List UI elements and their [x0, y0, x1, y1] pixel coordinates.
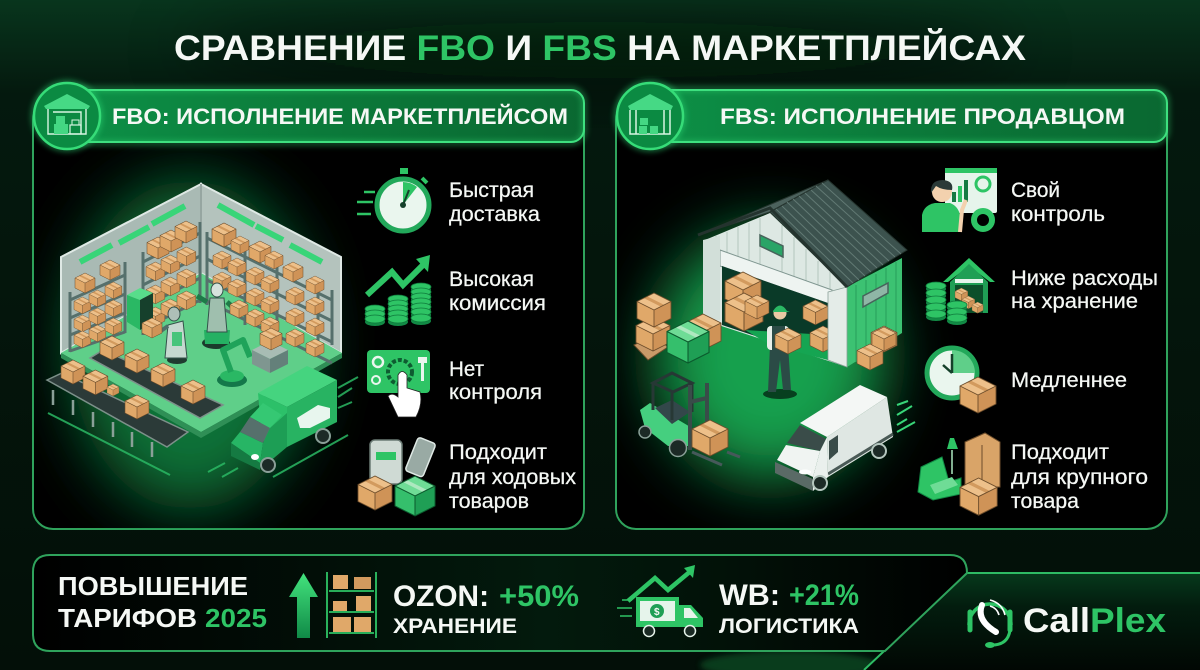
- panel glow: [655, 230, 885, 480]
- green truck: [231, 366, 337, 472]
- shelves and boxes: left wall: [70, 221, 200, 352]
- text: suitable for fast-moving goods: [449, 441, 576, 513]
- text: no control: контроля: [449, 381, 542, 404]
- heading: tariff increase: [58, 571, 267, 633]
- text: fast delivery: [449, 179, 540, 226]
- icon: warehouse and coins: [926, 258, 995, 325]
- text: wordmark: [1023, 602, 1166, 640]
- text: lower storage costs: Ниже расходы: [1011, 267, 1158, 290]
- text: suitable for large goods: [1011, 441, 1148, 513]
- text: suitable for large goods: для крупного: [1011, 466, 1148, 489]
- heading: tariff increase: ПОВЫШЕНИЕ: [58, 571, 248, 601]
- warehouse building: [698, 180, 907, 367]
- warehouse floor: [61, 273, 342, 432]
- stat: OZON: ХРАНЕНИЕ: [393, 615, 517, 638]
- illustration: automated marketplace warehouse with truck: [47, 184, 358, 477]
- panel: tariff increase 2025: [33, 555, 967, 651]
- warehouse walls: [61, 184, 341, 353]
- text: lower storage costs: на хранение: [1011, 290, 1138, 313]
- icon: up arrow: [289, 573, 318, 638]
- heading: tariff increase: ТАРИФОВ: [58, 603, 197, 633]
- text: suitable for large goods: Подходит: [1011, 441, 1109, 464]
- motion streaks: [48, 377, 358, 477]
- icon: warehouse badge FBO: [31, 80, 103, 152]
- text: own control: Свой: [1011, 179, 1060, 202]
- conveyor on floor with boxes: [90, 336, 223, 418]
- heading band: FBS: [643, 89, 1167, 143]
- panel frame: [616, 100, 1167, 529]
- text: high commission: комиссия: [449, 292, 546, 315]
- icon: truck with money and arrow: $: [654, 607, 660, 618]
- panel glow: [70, 180, 310, 510]
- text: suitable for large goods: товара: [1011, 490, 1079, 513]
- text: suitable for fast-moving goods: товаров: [449, 490, 529, 513]
- panel: FBO: [31, 80, 584, 529]
- heading band: FBS: FBS: ИСПОЛНЕНИЕ ПРОДАВЦОМ: [720, 104, 1125, 129]
- icon: truck with money and arrow: [617, 565, 703, 636]
- text: wordmark: Call: [1023, 602, 1090, 640]
- boxes near wall: [857, 326, 897, 370]
- icon: phones and boxes: [358, 437, 436, 516]
- robotic arm: [217, 340, 250, 387]
- shelves and boxes: right wall: [207, 223, 332, 363]
- icon: warehouse badge FBS: [614, 80, 686, 152]
- robot with box: [142, 307, 187, 364]
- green machine: [127, 288, 153, 330]
- robot green: [197, 283, 248, 349]
- text: own control: [1011, 179, 1105, 226]
- stat: WB: [719, 579, 859, 638]
- text: fast delivery: Быстрая: [449, 179, 534, 202]
- panel: FBS: [614, 80, 1167, 529]
- icon: headset with phone: [969, 600, 1011, 648]
- text: wordmark: Plex: [1090, 602, 1166, 640]
- text: no control: Нет: [449, 358, 484, 381]
- text: slower: Медленнее: [1011, 369, 1127, 392]
- logo corner background: [864, 573, 1200, 670]
- stat: WB: +21%: [789, 579, 859, 612]
- icon: furniture and box: [918, 433, 1000, 515]
- text: fast delivery: доставка: [449, 203, 540, 226]
- icon: control panel with hand: [367, 350, 430, 417]
- text: suitable for fast-moving goods: Подходит: [449, 441, 547, 464]
- stat: OZON: OZON:: [393, 580, 489, 613]
- icon: person with dashboard: [922, 168, 997, 232]
- stat: OZON: +50%: [499, 580, 579, 613]
- forklift: [639, 373, 740, 465]
- icon: stopwatch: [357, 168, 429, 231]
- heading: tariff increase: 2025: [205, 603, 267, 633]
- text: high commission: [449, 268, 546, 315]
- stat: WB: WB:: [719, 579, 780, 612]
- list: FBS features: [918, 168, 1158, 515]
- stat: OZON: [393, 580, 579, 638]
- icon: shelves with boxes: [327, 572, 376, 638]
- panel frame: [33, 100, 584, 529]
- motion streaks: [897, 401, 915, 432]
- text: lower storage costs: [1011, 267, 1158, 313]
- heading band: FBO: FBO: ИСПОЛНЕНИЕ МАРКЕТПЛЕЙСОМ: [112, 104, 568, 129]
- text: high commission: Высокая: [449, 268, 534, 291]
- illustration: seller warehouse, worker, forklift and van: [634, 180, 915, 491]
- crate with box: [252, 328, 288, 373]
- text: suitable for fast-moving goods: для ходовых: [449, 466, 576, 489]
- conveyor with legs and boxes: [47, 360, 188, 457]
- text: no control: [449, 358, 542, 404]
- text: own control: контроль: [1011, 203, 1105, 226]
- title: СРАВНЕНИЕ FBO И FBS НА МАРКЕТПЛЕЙСАХ: [174, 28, 1027, 68]
- stat: WB: ЛОГИСТИКА: [719, 615, 859, 638]
- logo: CallPlex: [969, 600, 1166, 648]
- panel frame: [33, 555, 967, 651]
- boxes on pallet: [634, 293, 721, 363]
- heading band: FBO: [60, 89, 584, 143]
- white van: [775, 385, 893, 491]
- icon: clock and box: [927, 348, 996, 413]
- icon: rising chart and coins: [365, 255, 431, 326]
- list: FBO features: [357, 168, 576, 516]
- worker with box: [763, 306, 801, 399]
